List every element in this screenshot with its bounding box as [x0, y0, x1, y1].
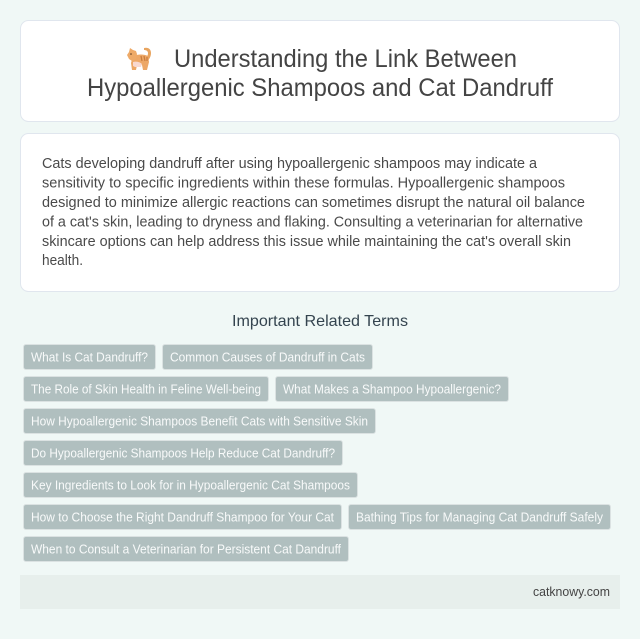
tag — [24, 344, 156, 370]
tag: The Role of Skin Health in Feline Well-being — [31, 382, 261, 396]
title: Understanding the Link Between — [174, 45, 517, 73]
tag — [24, 472, 358, 498]
title — [87, 45, 553, 102]
footer site name: catknowy.com — [533, 584, 610, 599]
tag: Common Causes of Dandruff in Cats — [170, 350, 365, 364]
text block: description: designed to minimize allergic reactions can sometimes disrupt the natural oil balance — [42, 195, 585, 211]
tag: What Makes a Shampoo Hypoallergenic? — [283, 382, 501, 396]
tag: What Is Cat Dandruff? — [31, 350, 148, 364]
text block: description: skincare options can help address this issue while maintaining the cat's overall skin — [42, 234, 571, 250]
text block: description: health. — [42, 253, 83, 269]
tag — [276, 376, 508, 402]
icon: cat — [127, 48, 151, 70]
tag — [24, 440, 342, 466]
tag: How Hypoallergenic Shampoos Benefit Cats with Sensitive Skin — [31, 414, 368, 428]
tag: How to Choose the Right Dandruff Shampoo for Your Cat — [31, 510, 334, 524]
title: Hypoallergenic Shampoos and Cat Dandruff — [87, 74, 553, 102]
tag — [24, 376, 268, 402]
heading: related terms: Important Related Terms — [232, 313, 408, 330]
tag: Bathing Tips for Managing Cat Dandruff Safely — [356, 510, 603, 524]
text block: description — [42, 156, 585, 269]
text block: description: Cats developing dandruff after using hypoallergenic shampoos may indicate a — [42, 156, 537, 172]
panel: description — [20, 134, 620, 292]
tag: When to Consult a Veterinarian for Persistent Cat Dandruff — [31, 542, 341, 556]
footer — [20, 575, 620, 609]
tag — [24, 408, 376, 434]
tag — [348, 504, 610, 530]
tag — [162, 344, 372, 370]
tag — [24, 536, 348, 562]
tag: Do Hypoallergenic Shampoos Help Reduce Cat Dandruff? — [31, 446, 335, 460]
header panel — [20, 20, 620, 122]
tag — [24, 504, 342, 530]
text block: description: sensitivity to specific ingredients within these formulas. Hypoallergenic shampoos — [42, 176, 565, 192]
text block: description: of a cat's skin, leading to dryness and flaking. Consulting a veterinarian for alternative — [42, 214, 583, 230]
tag: Key Ingredients to Look for in Hypoallergenic Cat Shampoos — [31, 478, 350, 492]
related terms tags — [24, 344, 610, 562]
